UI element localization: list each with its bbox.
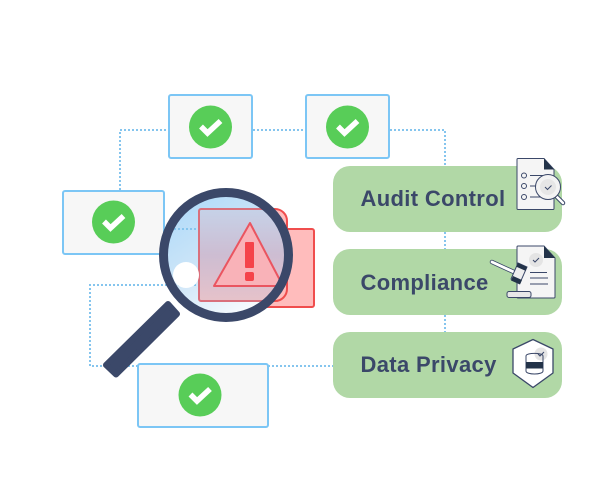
panel: audit control: Audit Control [360,186,505,211]
warning triangle icon [214,223,283,286]
alert cards behind lens [199,209,314,307]
panel: audit control [333,158,563,232]
panel: data privacy [333,332,562,398]
panel: data privacy: Data Privacy [360,352,497,377]
magnifying glass frame and handle [106,192,288,374]
status box: bottom check [138,364,268,427]
status box: left check [63,191,164,254]
magnifying glass lens [168,197,284,313]
icon: gavel and document [492,246,555,298]
status box: top right check [306,95,389,158]
status box: top left check [169,95,252,158]
panel: compliance [333,246,562,315]
icon: shield with database [513,340,553,388]
panel: compliance: Compliance [360,270,489,295]
dotted connector lines [90,130,445,366]
icon: audit document with magnifier [517,158,563,210]
